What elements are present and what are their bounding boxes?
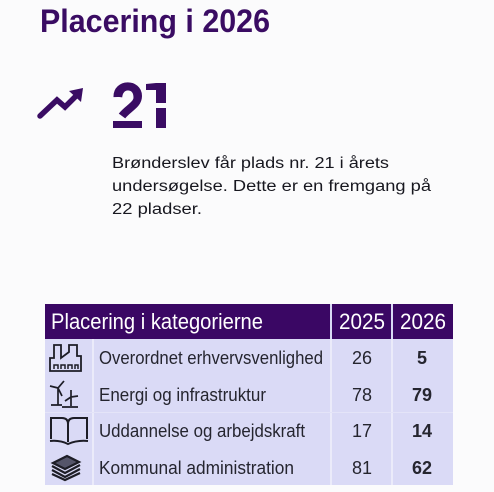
big number 21: 2	[116, 74, 140, 141]
title: Placering i 2026	[40, 3, 270, 39]
table header: Placering i kategorierne	[51, 309, 263, 334]
big number 21	[108, 73, 172, 142]
row: energi og infrastruktur: 79	[412, 385, 432, 405]
icon: factory	[50, 345, 81, 371]
row: kommunal administration: 81	[352, 458, 372, 478]
description text: Brønderslev får plads nr. 21 i årets	[112, 155, 389, 172]
row: uddannelse og arbejdskraft: 14	[412, 421, 432, 441]
row: uddannelse og arbejdskraft	[99, 421, 432, 441]
description text: undersøgelse. Dette er en fremgang på	[112, 178, 431, 195]
row: energi og infrastruktur: Energi og infrastruktur	[99, 385, 266, 405]
description text	[112, 155, 431, 218]
row: kommunal administration	[99, 458, 432, 478]
table header: 2026	[400, 309, 446, 334]
row: energi og infrastruktur: 78	[352, 385, 372, 405]
table header	[45, 304, 453, 339]
row: energi og infrastruktur	[99, 385, 432, 405]
icon: open book	[50, 418, 88, 444]
row: kommunal administration: 62	[412, 458, 432, 478]
description text: 22 pladser.	[112, 201, 202, 218]
row: overordnet erhvervsvenlighed: 5	[417, 348, 427, 368]
row: overordnet erhvervsvenlighed: Overordnet erhvervsvenlighed	[99, 348, 323, 368]
table body background	[45, 339, 453, 485]
row: overordnet erhvervsvenlighed: 26	[352, 348, 372, 368]
table: placering i kategorierne	[45, 304, 453, 485]
row: uddannelse og arbejdskraft: Uddannelse og arbejdskraft	[99, 421, 305, 441]
row: uddannelse og arbejdskraft: 17	[352, 421, 372, 441]
icon: upward trend arrow	[40, 88, 83, 116]
icon: wind turbines	[50, 381, 78, 407]
icon: stack of books	[52, 456, 80, 480]
row: kommunal administration: Kommunal administration	[99, 458, 294, 478]
table header: 2025	[339, 309, 385, 334]
big number 21: 1	[147, 73, 166, 142]
